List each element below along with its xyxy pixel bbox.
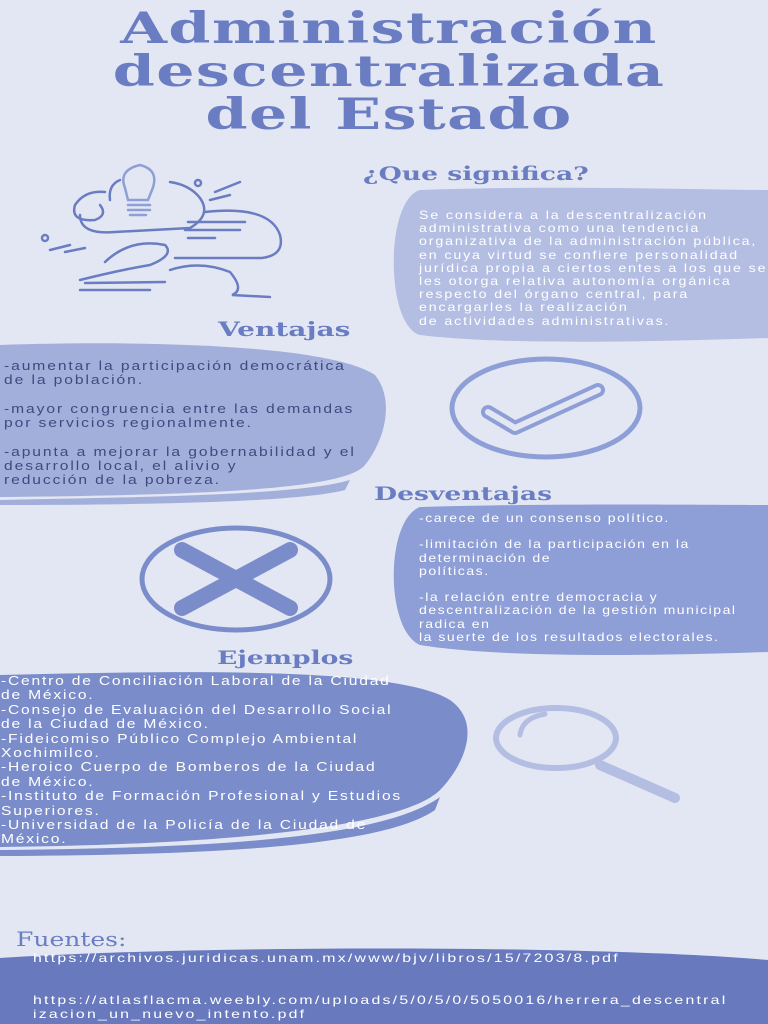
text: ejemplos list: de México. bbox=[1, 687, 94, 702]
text: ejemplos list: de la Ciudad de México. bbox=[1, 716, 210, 731]
text: desventajas list: -la relación entre democracia y bbox=[419, 590, 658, 604]
title: del Estado bbox=[205, 90, 573, 140]
text: definition: respecto del órgano central, para bbox=[419, 287, 689, 301]
text: ejemplos list: -Consejo de Evaluación del Desarrollo Social bbox=[1, 702, 392, 717]
text: definition: de actividades administrativas. bbox=[419, 314, 670, 328]
text: ejemplos list: -Heroico Cuerpo de Bomberos de la Ciudad bbox=[1, 759, 377, 774]
text: ventajas list bbox=[4, 358, 356, 487]
text: definition bbox=[418, 208, 767, 328]
text: definition: jurídica propia a ciertos entes a los que se bbox=[419, 261, 767, 275]
title bbox=[113, 4, 665, 140]
text: desventajas list: radica en bbox=[419, 617, 490, 631]
text: definition: organizativa de la administración pública, bbox=[419, 234, 757, 248]
text: ventajas list: de la población. bbox=[4, 372, 144, 387]
title: Administración bbox=[120, 4, 658, 54]
text: definition: Se considera a la descentralización bbox=[419, 208, 708, 222]
text: ejemplos list: México. bbox=[1, 831, 67, 846]
text: definition: encargarles la realización bbox=[419, 300, 629, 314]
text: desventajas list: determinación de bbox=[419, 551, 551, 565]
text: ejemplos list: -Instituto de Formación Profesional y Estudios bbox=[1, 788, 402, 803]
text: ejemplos list: Superiores. bbox=[1, 803, 101, 818]
text: ventajas list: reducción de la pobreza. bbox=[4, 472, 221, 487]
text: ventajas list: -apunta a mejorar la gobernabilidad y el bbox=[4, 444, 356, 459]
text: sources: https://archivos.juridicas.unam.mx/www/bjv/libros/15/7203/8.pdf bbox=[33, 951, 620, 965]
text: ejemplos list: -Centro de Conciliación Laboral de la Ciudad bbox=[1, 673, 391, 688]
text: ejemplos list bbox=[1, 673, 402, 846]
title: descentralizada bbox=[113, 47, 665, 97]
text: desventajas list: políticas. bbox=[419, 564, 490, 578]
heading: Que significa: ¿Que significa? bbox=[363, 163, 589, 185]
text: ventajas list: por servicios regionalmente. bbox=[4, 415, 253, 430]
text: definition: administrativa como una tendencia bbox=[419, 221, 700, 235]
text: ventajas list: -mayor congruencia entre las demandas bbox=[4, 401, 354, 416]
heading: Ventajas: Ventajas bbox=[218, 317, 350, 341]
text: ventajas list: -aumentar la participación democrática bbox=[4, 358, 346, 373]
text: ejemplos list: -Fideicomiso Público Complejo Ambiental bbox=[1, 731, 358, 746]
text: definition: en cuya virtud se confiere personalidad bbox=[419, 248, 739, 262]
text: desventajas list bbox=[419, 511, 737, 644]
text: ejemplos list: -Universidad de la Policía de la Ciudad de bbox=[1, 817, 367, 832]
text: desventajas list: -carece de un consenso político. bbox=[419, 511, 670, 525]
text: desventajas list: descentralización de la gestión municipal bbox=[419, 603, 737, 617]
text: ventajas list: desarrollo local, el alivio y bbox=[4, 458, 237, 473]
text: ejemplos list: de México. bbox=[1, 774, 94, 789]
text: sources: izacion_un_nuevo_intento.pdf bbox=[33, 1007, 306, 1021]
text: sources bbox=[33, 951, 727, 1021]
heading: Fuentes: Fuentes: bbox=[16, 927, 126, 951]
text: desventajas list: la suerte de los resultados electorales. bbox=[419, 630, 719, 644]
text: desventajas list: -limitación de la participación en la bbox=[419, 537, 690, 551]
heading: Ejemplos: Ejemplos bbox=[217, 647, 353, 669]
text: definition: les otorga relativa autonomía orgánica bbox=[419, 274, 732, 288]
text: sources: https://atlasflacma.weebly.com/uploads/5/0/5/0/5050016/herrera_descentral bbox=[33, 993, 727, 1007]
text: ejemplos list: Xochimilco. bbox=[1, 745, 101, 760]
heading: Desventajas: Desventajas bbox=[374, 483, 552, 505]
